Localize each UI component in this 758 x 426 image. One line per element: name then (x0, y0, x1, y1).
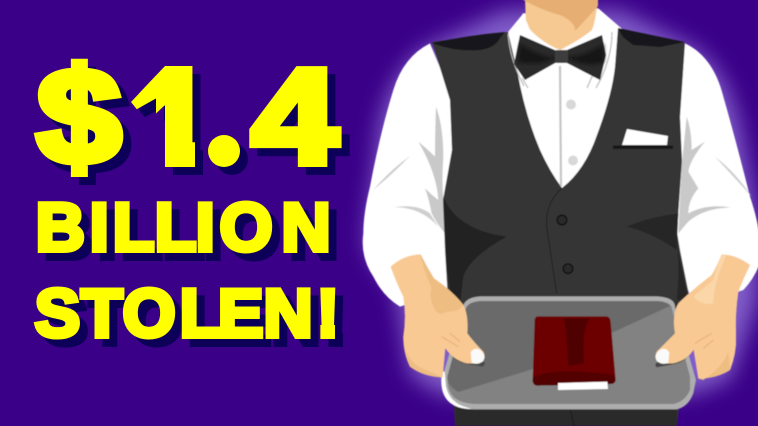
headline: $1.4: . (203, 39, 245, 190)
headline: $1.4 (34, 58, 342, 177)
headline: $1.4: $ (37, 41, 121, 192)
neck (515, 0, 612, 54)
pocket square (613, 129, 673, 149)
sleeve folds right (678, 117, 731, 233)
headline: $1.4: 4 (252, 41, 338, 192)
shirt placket and buttons (560, 66, 578, 186)
vest lower shading (443, 188, 688, 333)
right hand (655, 254, 750, 380)
figure glow (366, 10, 758, 395)
sleeve folds left (418, 107, 445, 233)
headline: $1.4: 1 (129, 41, 213, 192)
headline shadow: 4 (260, 49, 346, 200)
left hand (391, 254, 485, 377)
headline: BILLION: BILLION (36, 190, 331, 266)
headline shadow: STOLEN! (43, 284, 347, 360)
headline shadow: . (211, 47, 253, 198)
headline shadow: 1 (137, 49, 221, 200)
shoulder shadows (432, 32, 505, 50)
collar lines (508, 32, 612, 88)
hand backs behind tray (391, 254, 750, 379)
headline (35, 39, 347, 359)
waiter figure (363, 0, 758, 426)
vest buttons (557, 215, 573, 274)
headline shadow: $ (45, 49, 129, 200)
headline shadow: BILLION (44, 198, 339, 274)
bow tie (514, 35, 606, 80)
serving tray (441, 296, 696, 409)
shirt and sleeves (363, 8, 758, 307)
headline: STOLEN!: STOLEN! (35, 276, 339, 352)
vest (432, 28, 690, 426)
headline shadow (43, 47, 347, 359)
vest lower dark band (455, 400, 677, 426)
wallet (533, 316, 616, 390)
